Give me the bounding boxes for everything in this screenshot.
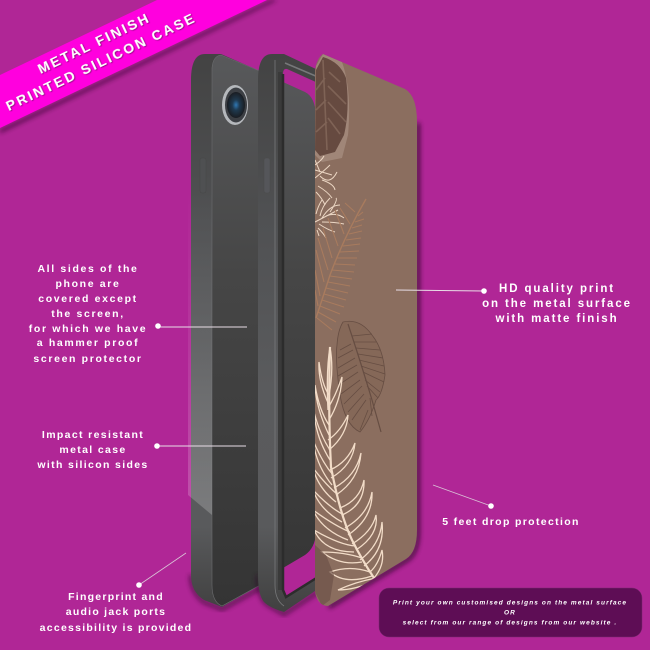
callout text: ports: audio jack ports	[66, 606, 166, 618]
icon: frame side button	[264, 158, 270, 193]
callout text: ports: accessibility is provided	[40, 622, 192, 634]
callout: impact resistant	[36, 429, 246, 471]
cream small ferns	[315, 156, 344, 238]
callout text: all sides: for which we have	[29, 323, 147, 335]
callout text: HD quality	[482, 283, 632, 325]
callout text: impact resistant: with silicon sides	[36, 459, 149, 471]
callout text: ports: Fingerprint and	[68, 591, 164, 603]
pointer: drop protection	[433, 485, 494, 509]
phone case: silicon frame	[258, 54, 318, 614]
callout: ports accessibility	[40, 553, 192, 634]
printed metal panel	[313, 54, 418, 607]
callout text: all sides	[29, 263, 147, 365]
pointer: HD quality	[396, 288, 487, 294]
callout text: impact resistant: Impact resistant	[42, 429, 144, 441]
banner heading line 1: METAL FINISH	[35, 9, 153, 77]
leaf artwork	[313, 54, 385, 606]
note text: OR	[504, 610, 516, 616]
callout text: all sides: covered except	[38, 293, 138, 305]
callout text: HD quality: with matte finish	[494, 313, 619, 325]
pointer: impact resistant	[154, 443, 246, 449]
dark outline monstera	[336, 321, 385, 432]
callout text: all sides: the screen,	[51, 308, 125, 320]
callout text: impact resistant	[36, 429, 149, 471]
callout text: HD quality: on the metal surface	[482, 298, 632, 310]
icon: side button	[200, 158, 206, 193]
callout text: all sides: phone are	[55, 278, 121, 290]
monstera leaf: top	[315, 54, 349, 162]
pointer: all sides	[155, 323, 247, 329]
phone case: metal back shell	[188, 54, 262, 609]
cream large fern	[313, 347, 383, 590]
note text: select from our range of designs from our website .	[403, 620, 617, 626]
callout text: drop protection: 5 feet drop protection	[442, 516, 580, 528]
note text: Print your own customised designs on the metal surface	[393, 600, 627, 606]
callout text: ports	[40, 591, 192, 634]
callout text: HD quality: HD quality print	[499, 283, 615, 295]
brown leaf lower left corner	[315, 545, 334, 606]
panel: customised designs note	[379, 588, 642, 637]
pointer: ports	[136, 553, 186, 588]
callout text: impact resistant: metal case	[59, 444, 127, 456]
brown fern	[315, 199, 366, 330]
note text	[393, 600, 627, 626]
inner hard panel	[283, 82, 316, 568]
glass sheen on shell edge	[188, 190, 212, 515]
banner: metal finish printed silicon case	[0, 0, 277, 133]
callout text: all sides: All sides of the	[37, 263, 139, 275]
icon: camera lens	[222, 85, 248, 125]
callout: HD quality print	[396, 283, 632, 325]
callout text: all sides: a hammer proof	[37, 337, 139, 349]
callout text: all sides: screen protector	[33, 353, 143, 365]
banner heading line 2: PRINTED SILICON CASE	[3, 9, 198, 114]
callout: drop protection	[433, 485, 580, 528]
callout: all sides covered	[29, 263, 247, 365]
